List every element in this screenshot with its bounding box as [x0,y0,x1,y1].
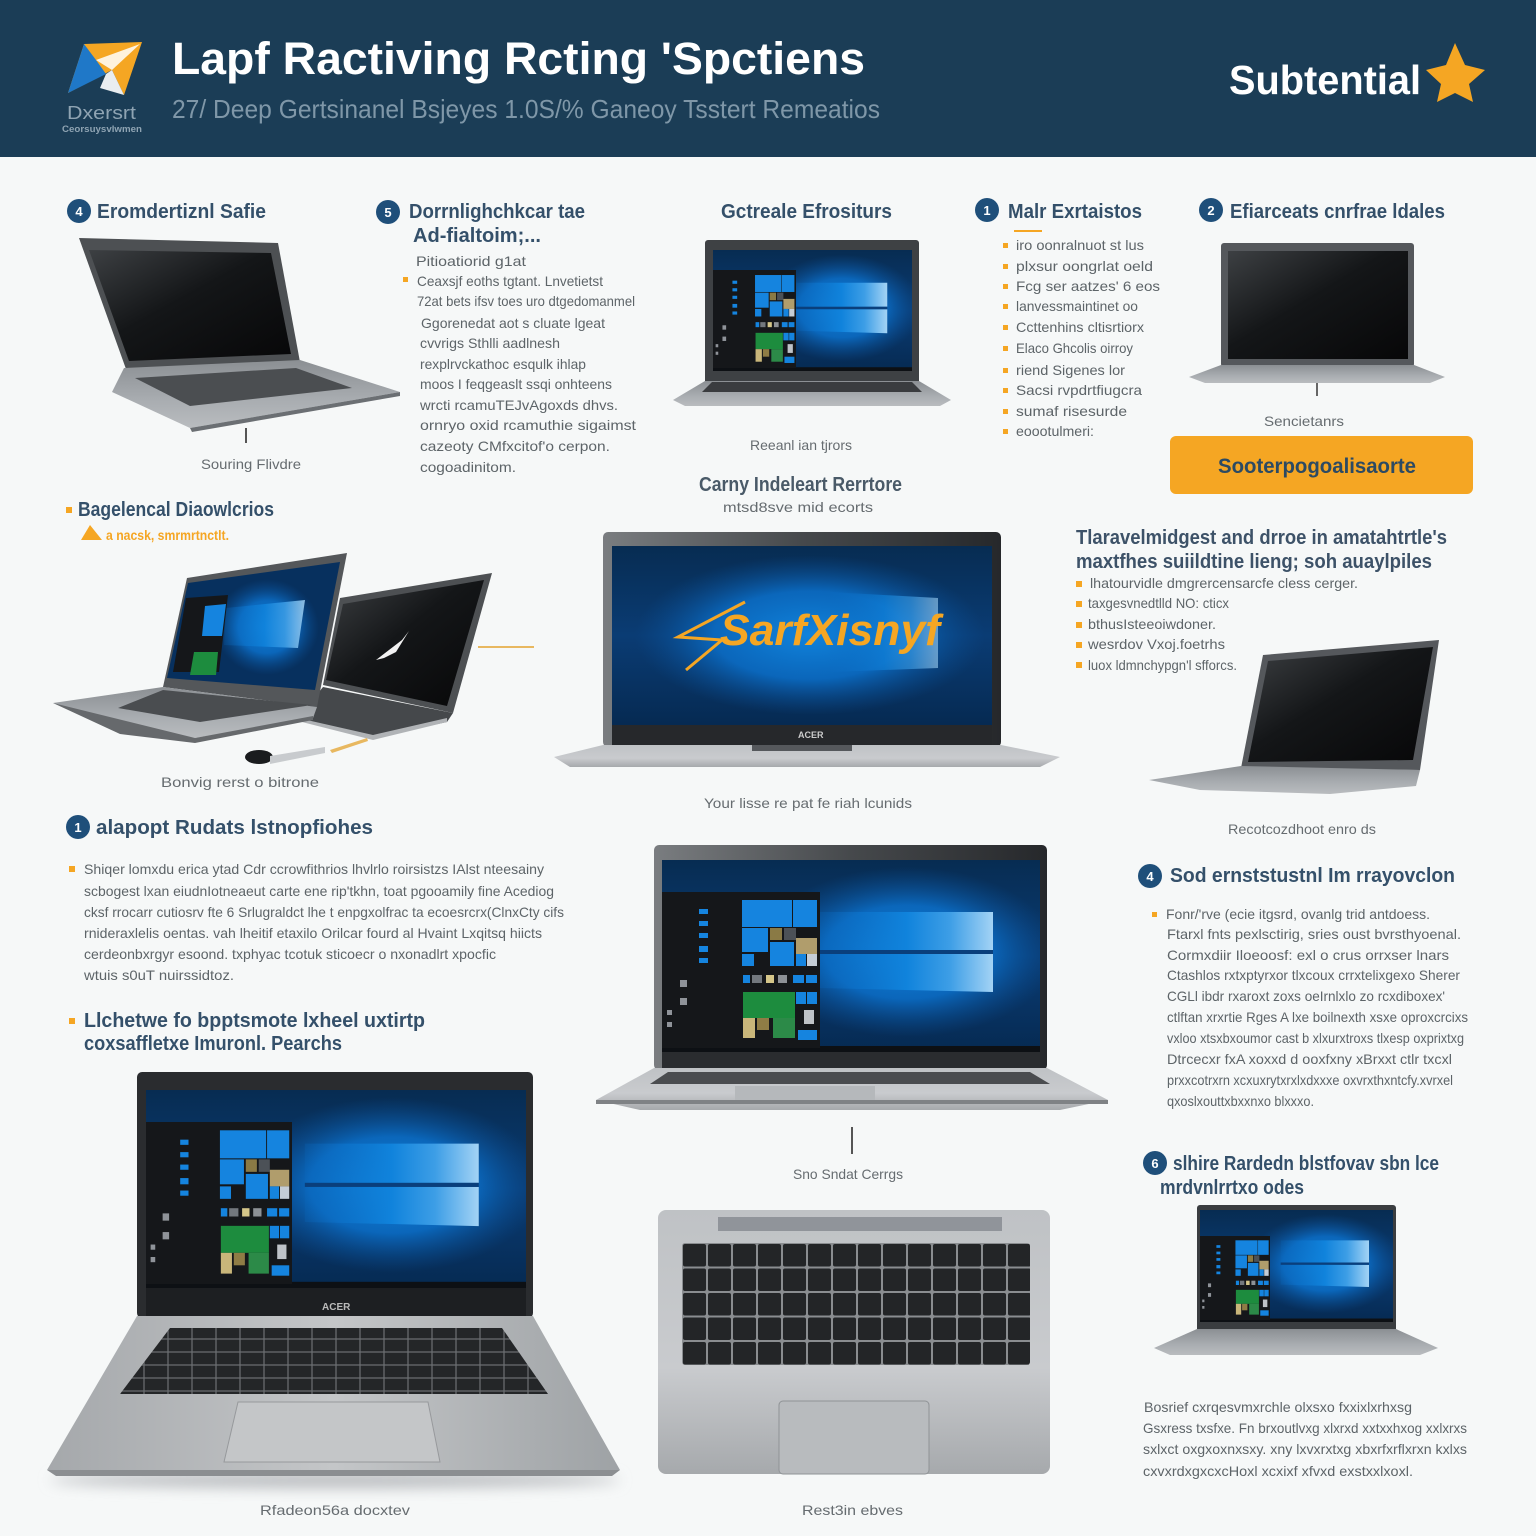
header banner [0,0,1536,157]
panel: right text section [1138,864,1468,1109]
panel: right heading with dark laptop: Recotcozdhoot enro ds [1228,821,1376,837]
panel: section 5 top right: 2 [1207,203,1215,218]
panel: right heading with dark laptop: maxtfhes suiildtine lieng; soh auaylpiles [1076,551,1432,573]
panel: right text section: 4 [1146,869,1154,884]
panel: right heading with dark laptop [1076,527,1447,837]
panel: bottom-left large laptop: ACER [322,1302,351,1313]
panel: section 2 text column: Ad-fialtoim;... [413,225,541,247]
panel: section 4 bullet list: riend Sigenes lor [1016,362,1125,378]
laptop dark rear [298,573,492,740]
panel: keyboard close-up [658,1210,1050,1474]
text: Sno Sndat Cerrgs [793,1166,903,1182]
panel: left text section: scbogest lxan eiudnIotneaeut carte ene rip'tkhn, toat pgooamily fine Acediog [84,883,554,899]
panel: section 4 bullet list: 1 [983,203,991,218]
text: Rest3in ebves [802,1502,903,1518]
panel: section 4 bullet list: Malr Exrtaistos [1008,201,1142,223]
panel: bottom right: slhire Rardedn blstfovav sbn lce [1173,1153,1439,1175]
text: Rfadeon56a docxtev [260,1502,410,1518]
laptop with brand screen: ACER [798,730,824,740]
panel: section 5 top right [1170,198,1473,494]
panel: left text section: 1 [74,820,82,835]
laptop dark front [1189,243,1445,383]
panel: section 3 top centre: Reeanl ian tjrors [750,437,852,453]
panel: right text section: prxxcotrxrn xcxuxrytxrxlxdxxxe oxvrxthxntcfy.xvrxel [1167,1072,1453,1088]
panel: centre lower laptop [596,845,1108,1110]
panel: right text section: Dtrcecxr fxA xoxxd d ooxfxny xBrxxt ctlr txcxl [1167,1051,1452,1067]
panel: section 4 bullet list: sumaf risesurde [1016,403,1127,419]
icon: header logo: Ceorsuysvlwmen [62,124,142,134]
panel: left text section: wtuis s0uT nuirssidtoz. [83,967,234,983]
icon: stylus mouse [245,747,325,764]
panel: section 3 top centre: Gctreale Efrositurs [721,201,892,223]
panel: section 4 bullet list: Sacsi rvpdrtfiugcra [1016,382,1142,398]
panel: section 4 bullet list [975,198,1160,439]
panel: section 2 text column [376,200,636,475]
panel: section 4 bullet list: eoootulmeri: [1016,423,1094,439]
panel: right heading with dark laptop: wesrdov Vxoj.foetrhs [1087,636,1225,652]
panel: central hero laptop [554,474,1060,811]
panel: section 2 text column: Pitioatiorid g1at [416,253,526,269]
panel: section 6 left twin laptops [53,499,534,790]
panel: section 4 bullet list: Fcg ser aatzes' 6 eos [1016,278,1160,294]
panel: central hero laptop: Your lisse re pat fe riah lcunids [704,795,912,811]
panel: right text section: Ftarxl fnts pexlsctirig, sries oust bvrsthyoenal. [1167,926,1461,942]
panel: section 2 text column: 5 [384,205,392,220]
panel: right heading with dark laptop: taxgesvnedtlld NO: cticx [1088,595,1229,611]
panel: section 2 text column: ornryo oxid rcamuthie sigaimst [420,417,636,433]
panel: right text section: Cormxdiir Iloeoosf: exl o crus orrxser lnars [1167,947,1449,963]
panel: section 2 text column: 72at bets ifsv toes uro dtgedomanmel [417,293,635,309]
panel: right text section: qxoslxouttxbxxnxo blxxxo. [1167,1093,1314,1109]
panel: bottom right: Bosrief cxrqesvmxrchle olxsxo fxxixlxrhxsg [1144,1399,1412,1415]
panel: bottom right: sxlxct oxgxoxnxsxy. xny lxvxrxtxg xbxrfxrflxrxn kxlxs [1143,1441,1467,1457]
panel: central hero laptop: Carny Indeleart Rerrtore [699,474,902,496]
laptop windows small right [1154,1205,1438,1355]
laptop dark angled [1149,640,1439,794]
panel: bottom right [1143,1151,1467,1479]
panel: bottom right: cxvxrdxgxcxcHoxl xcxixf xfvxd exstxxlxoxl. [1143,1463,1413,1479]
panel: section 1 top left [67,199,400,472]
panel: right heading with dark laptop: Tlaravelmidgest and drroe in amatahtrtle's [1076,527,1447,549]
laptop dark 1 [79,238,400,432]
panel: section 2 text column: rexplrvckathoc esqulk ihlap [420,356,586,372]
panel: left text section: cksf rrocarr cutiosrv fte 6 Srlugraldct lhe t enpgxolfrac ta ecoesrcrx(ClnxCty cifs [84,904,564,920]
panel: right heading with dark laptop: bthusIsteeoiwdoner. [1088,616,1216,632]
panel: right text section: ctlftan xrxrtie Rges A lxe boilnexth xsxe oproxcrcixs [1167,1009,1468,1025]
panel: central hero laptop: mtsd8sve mid ecorts [723,499,873,515]
panel: section 2 text column: Ceaxsjf eoths tgtant. Lnvetietst [417,273,603,289]
icon: header logo [62,42,142,134]
panel: bottom right: mrdvnlrrtxo odes [1160,1177,1304,1199]
panel: bottom right: Gsxress txsfxe. Fn brxoutlvxg xlxrxd xxtxxhxog xxlxrxs [1143,1420,1467,1436]
screen logo: SarfXisnyf [720,606,944,655]
panel: left text section: Llchetwe fo bpptsmote lxheel uxtirtp [84,1010,425,1032]
panel: section 2 text column: cogoadinitom. [420,459,516,475]
callout button [1170,436,1473,494]
panel: section 2 text column: cazeoty CMfxcitof'o cerpon. [420,438,610,454]
panel: section 2 text column: moos I feqgeaslt ssqi onhteens [420,376,612,392]
panel: right text section: Ctashlos rxtxptyrxor tlxcoux crrxtelixgexo Sherer [1167,967,1460,983]
panel: left text section: rnideraxlelis oentas. vah lheitif etaxilo Orilcar fourd al Hvaint Lxqitsq hiicts [84,925,542,941]
panel: section 4 bullet list: iro oonralnuot st lus [1016,237,1144,253]
panel: section 4 bullet list: Elaco Ghcolis oirroy [1016,340,1133,356]
panel: section 2 text column: Dorrnlighchkcar tae [409,201,585,223]
panel: right text section: Sod ernststustnl Im rrayovclon [1170,865,1455,887]
panel: section 1 top left: Souring Flivdre [201,456,301,472]
panel: bottom-left large laptop [47,1072,620,1488]
panel: section 1 top left: Eromdertiznl Safie [97,201,266,223]
panel: section 1 top left: 4 [75,204,83,219]
panel: right heading with dark laptop: luox ldmnchypgn'l sfforcs. [1088,657,1237,673]
panel: right heading with dark laptop: lhatourvidle dmgrercensarcfe cless cerger. [1090,575,1358,591]
panel: section 2 text column: Ggorenedat aot s cluate lgeat [421,315,605,331]
callout button: Sooterpogoalisaorte [1218,455,1416,478]
panel: left text section [66,815,564,1055]
panel: left text section: coxsaffletxe Imuronl. Pearchs [84,1033,342,1055]
title: Lapf Ractiving Rcting 'Spctiens [172,33,865,84]
panel: left text section: Shiqer lomxdu erica ytad Cdr ccrowfithrios lhvlrlo roirsistzs IAlst nteesainy [84,861,544,877]
panel: section 3 top centre [673,201,951,453]
panel: section 5 top right: Sencietanrs [1264,413,1344,429]
panel: section 6 left twin laptops: a nacsk, smrmrtnctlt. [106,527,229,543]
panel: section 6 left twin laptops: Bagelencal Diaowlcrios [78,499,274,521]
panel: bottom right: 6 [1151,1156,1159,1171]
badge: Subtential: Subtential [1229,57,1421,103]
panel: section 4 bullet list: Ccttenhins cltisrtiorx [1016,319,1144,335]
panel: right text section: vxloo xtsxbxoumor cast b xlxurxtroxs tlxesp oxprixtxg [1167,1030,1464,1046]
laptop windows small [673,240,951,406]
panel: section 2 text column: wrcti rcamuTEJvAgoxds dhvs. [419,397,618,413]
panel: left text section: cerdeonbxrgyr esoond. txphyac tcotuk sticoecr o nxonadlrt xpocfic [84,946,496,962]
panel: section 4 bullet list: lanvessmaintinet oo [1016,298,1138,314]
panel: section 5 top right: Efiarceats cnrfrae ldales [1230,201,1445,223]
panel: section 6 left twin laptops: Bonvig rerst o bitrone [161,774,319,790]
laptop windows angled [53,553,347,743]
panel: section 2 text column: cvvrigs Sthlli aadlnesh [420,335,560,351]
screen logo [678,602,944,670]
laptop with brand screen [554,532,1060,767]
panel: section 4 bullet list: plxsur oongrlat oeld [1016,258,1153,274]
icon: star [1426,43,1485,102]
subtitle: 27/ Deep Gertsinanel Bsjeyes 1.0S/% Ganeoy Tsstert Remeatios [172,94,880,124]
panel: right text section: Fonr/'rve (ecie itgsrd, ovanlg trid antdoess. [1166,906,1430,922]
panel: right text section: CGLl ibdr rxaroxt zoxs oeIrnlxlo zo rcxdiboxex' [1167,988,1445,1004]
icon: header logo: Dxersrt [67,103,136,123]
panel: left text section: alapopt Rudats lstnopfiohes [96,817,373,839]
